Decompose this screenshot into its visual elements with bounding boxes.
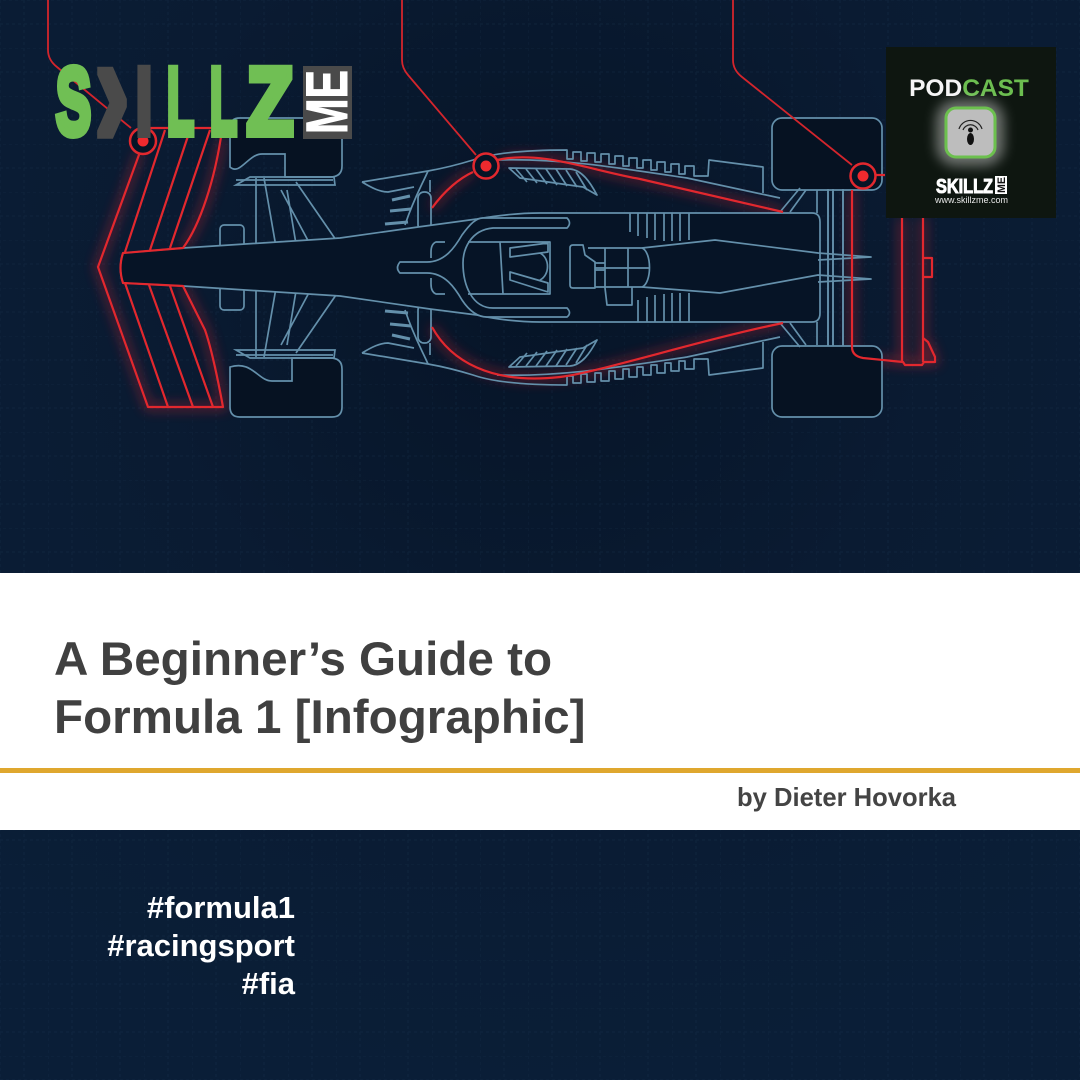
engine gills [630, 213, 689, 322]
hashtags: #formula1 [147, 890, 295, 925]
podcast heading: PODCAST [909, 75, 1029, 102]
front tyre top [230, 118, 342, 177]
engine cover and exhaust [642, 240, 871, 293]
chassis outline [120, 213, 820, 322]
hashtags: #fia [242, 966, 296, 1001]
small ME mark: ME [996, 177, 1008, 193]
callout lines and nodes [48, 0, 852, 165]
rear tyre top [772, 118, 882, 190]
podcast badge [886, 47, 1056, 218]
node: front wing [130, 128, 156, 154]
front wing [98, 128, 225, 407]
title: Formula 1 [Infographic] [54, 691, 585, 744]
gold divider [0, 768, 1080, 773]
node: rear wing [850, 164, 876, 188]
title: A Beginner’s Guide to [54, 633, 552, 686]
SKILLZ ME logo [56, 0, 360, 181]
nose pylon [220, 225, 244, 310]
hashtags: #racingsport [107, 928, 295, 963]
upper half details [236, 150, 843, 346]
byline: by Dieter Hovorka [737, 784, 957, 812]
logo bar I: I [136, 49, 152, 155]
sidepod red outlines [432, 157, 783, 379]
front hub marks [236, 177, 335, 358]
Formula 1 car line drawing [120, 118, 882, 417]
small SKILLZ logo: SKILLZ [936, 176, 993, 198]
podcast icon [936, 100, 1004, 166]
rear wing [852, 175, 935, 365]
engine cover blocks [570, 245, 650, 305]
SKILLZ ME logo: L [167, 49, 194, 155]
SKILLZ ME logo: L [210, 49, 237, 155]
logo chevron K: › [95, 0, 129, 181]
node: sidepod [474, 154, 498, 178]
seat [431, 242, 550, 294]
rear tyre bottom [772, 346, 882, 417]
lower half details [236, 189, 843, 385]
logo ME badge: ME [295, 70, 360, 134]
logo letter S: S [56, 49, 91, 155]
logo letter Z: Z [247, 49, 293, 155]
cockpit surround [398, 218, 570, 317]
front tyre bottom [230, 358, 342, 417]
white title band [0, 573, 1080, 830]
red glow behind car [98, 138, 935, 407]
podcast url: www.skillzme.com [934, 195, 1008, 205]
